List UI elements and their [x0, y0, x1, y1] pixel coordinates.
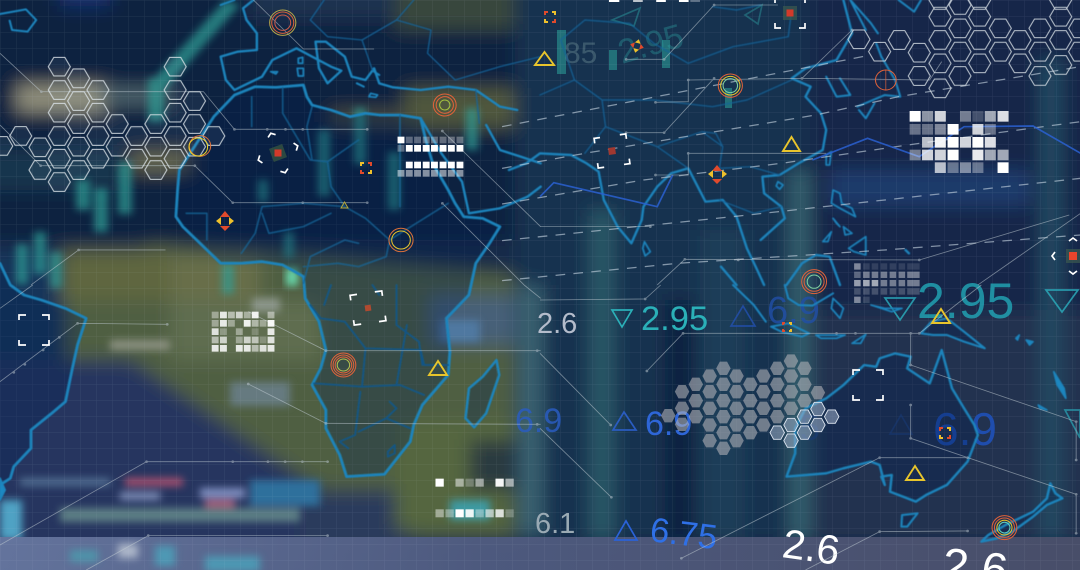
- blue trend line: [540, 126, 1080, 207]
- yellow warning triangles: [341, 52, 950, 480]
- numeric data readouts: 5: [800, 407, 820, 448]
- pixel block: south Africa coast: [435, 479, 514, 517]
- pixel block: Indonesia: [854, 263, 920, 303]
- pixel block: top strip: [609, 0, 700, 2]
- numeric data readouts: 6.75: [648, 511, 719, 557]
- Australia and Oceania: [733, 285, 1066, 542]
- numeric data readouts: 85: [564, 37, 597, 70]
- Africa, Europe, Middle East: [0, 0, 541, 477]
- pixel block: central Atlantic: [212, 312, 274, 352]
- numeric data readouts: 6.9: [515, 402, 562, 440]
- numeric data readouts: 2.95: [917, 273, 1014, 329]
- numeric data readouts: 2.95: [641, 300, 708, 338]
- numeric data readouts: 6.9: [645, 405, 692, 443]
- numeric data readouts: 2.6: [537, 308, 577, 340]
- hexagon cluster: left: [0, 57, 225, 191]
- numeric data readouts: 2.95: [614, 17, 688, 72]
- white target brackets: [19, 0, 1080, 400]
- pixel block: Africa north: [398, 137, 463, 177]
- orange and yellow arrow markers: [216, 37, 727, 231]
- bottom band: [0, 537, 1080, 570]
- pixel block: top right: [910, 111, 1009, 173]
- dashed trajectory lines: [502, 55, 1080, 281]
- concentric ring markers: [189, 10, 1017, 540]
- numeric data readouts: 6.1: [535, 508, 575, 540]
- numeric data readouts: 6.9: [933, 403, 997, 455]
- blue light smears over the bottom band: [70, 544, 260, 570]
- numeric data readouts: [515, 17, 1014, 570]
- hexagon cluster: grey filled: [661, 354, 839, 455]
- outlined triangles beside readouts: [612, 5, 1080, 540]
- corner square markers: [361, 12, 950, 438]
- hexagon cluster: top right: [848, 0, 1080, 98]
- numeric data readouts: 6.9: [767, 290, 820, 332]
- South and East Asia: [509, 0, 921, 285]
- southern Africa borders, South America, Madagascar: [0, 263, 499, 500]
